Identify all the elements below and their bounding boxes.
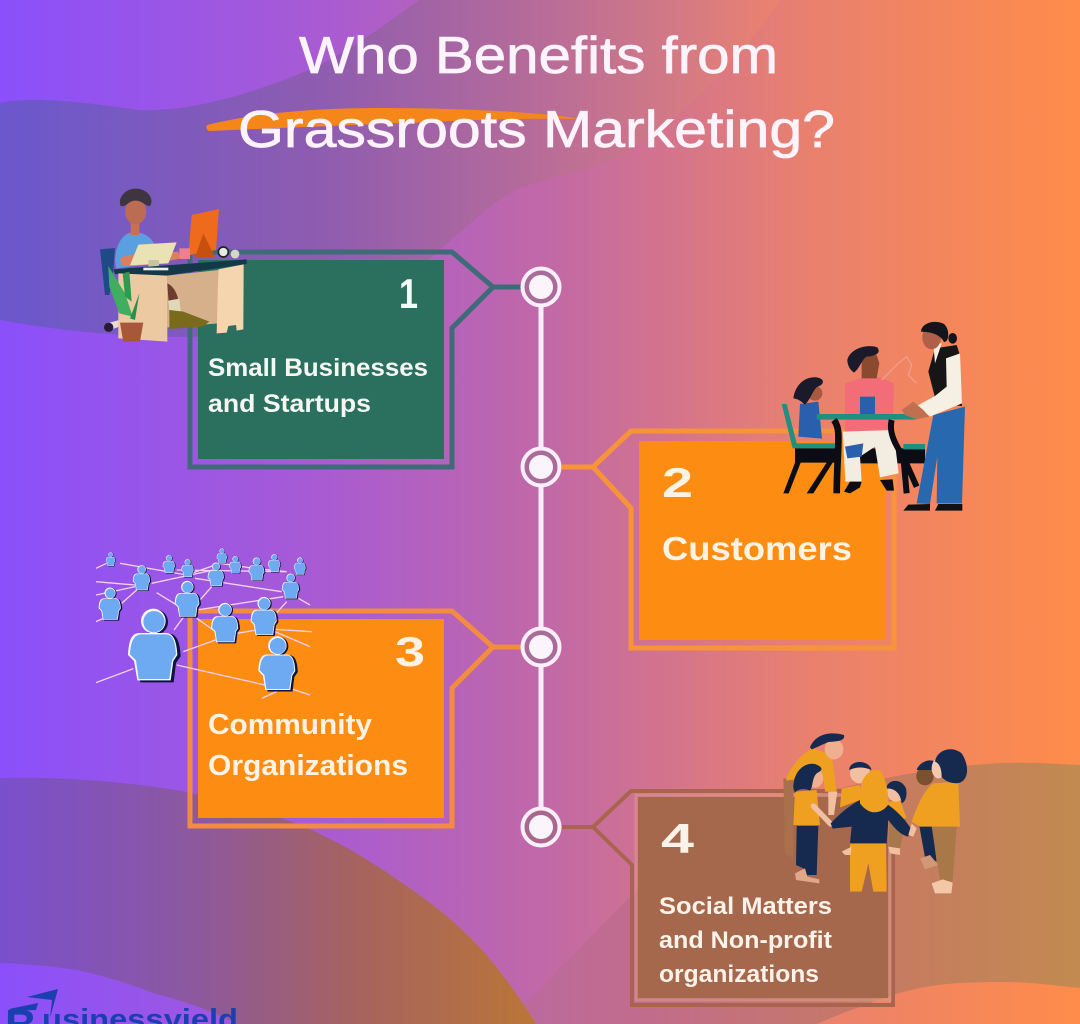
logo: Businessyield — [5, 989, 238, 1024]
panel 3 label: Organizations — [208, 750, 408, 782]
panel 4: social matters — [562, 791, 893, 1005]
panel 3 outline and connector — [190, 611, 522, 826]
panel 3 number: 3 — [395, 628, 425, 675]
panel 1 label — [208, 354, 428, 418]
panel 4 fill — [638, 797, 888, 998]
panel 4 outline and connector — [562, 791, 893, 1005]
icon: person working at desk — [100, 189, 247, 342]
panel 4 number: 4 — [661, 815, 695, 862]
icon: network of people — [96, 548, 312, 698]
panel 3 label — [208, 709, 408, 782]
panel 4 label: organizations — [659, 961, 819, 988]
panel 4 label: Social Matters — [659, 893, 832, 920]
panel 3 fill — [198, 619, 444, 818]
panel 2 outline and connector — [562, 431, 894, 648]
panel 1 label: Small Businesses — [208, 354, 428, 382]
timeline node 1 — [522, 268, 560, 306]
panel 2 number: 2 — [662, 459, 693, 506]
panel 2: customers — [562, 431, 894, 648]
panel 1 label: and Startups — [208, 390, 371, 418]
panel 1: small businesses — [190, 252, 522, 467]
panel 3 label: Community — [208, 709, 372, 741]
panel 4 label: and Non-profit — [659, 927, 832, 954]
title line 1: Who Benefits from — [299, 27, 778, 85]
panel 2 label: Customers — [662, 530, 852, 567]
title — [238, 27, 835, 159]
network connection lines — [96, 563, 312, 698]
panel 3: community organizations — [190, 611, 522, 826]
timeline node 3 — [522, 628, 560, 666]
background wave: bottom right — [505, 763, 1080, 1024]
background wave: bottom left — [0, 778, 536, 1024]
panel 4 label — [659, 893, 832, 988]
logo arrow mark — [9, 989, 58, 1018]
timeline node 4 — [522, 808, 560, 846]
title highlight brush stroke — [206, 108, 582, 131]
background wave: top left — [0, 0, 780, 337]
icon: group of people joining hands — [783, 733, 967, 893]
timeline node 2 — [522, 448, 560, 486]
title line 2: Grassroots Marketing? — [238, 101, 835, 159]
icon: customers at table with server — [782, 322, 965, 511]
timeline connector line — [538, 287, 544, 827]
panel 1 outline and connector — [190, 252, 522, 467]
panel 2 fill — [639, 441, 886, 640]
panel 1 number: 1 — [399, 270, 418, 317]
panel 4 inner light band — [636, 795, 890, 1000]
panel 1 fill — [198, 260, 444, 459]
